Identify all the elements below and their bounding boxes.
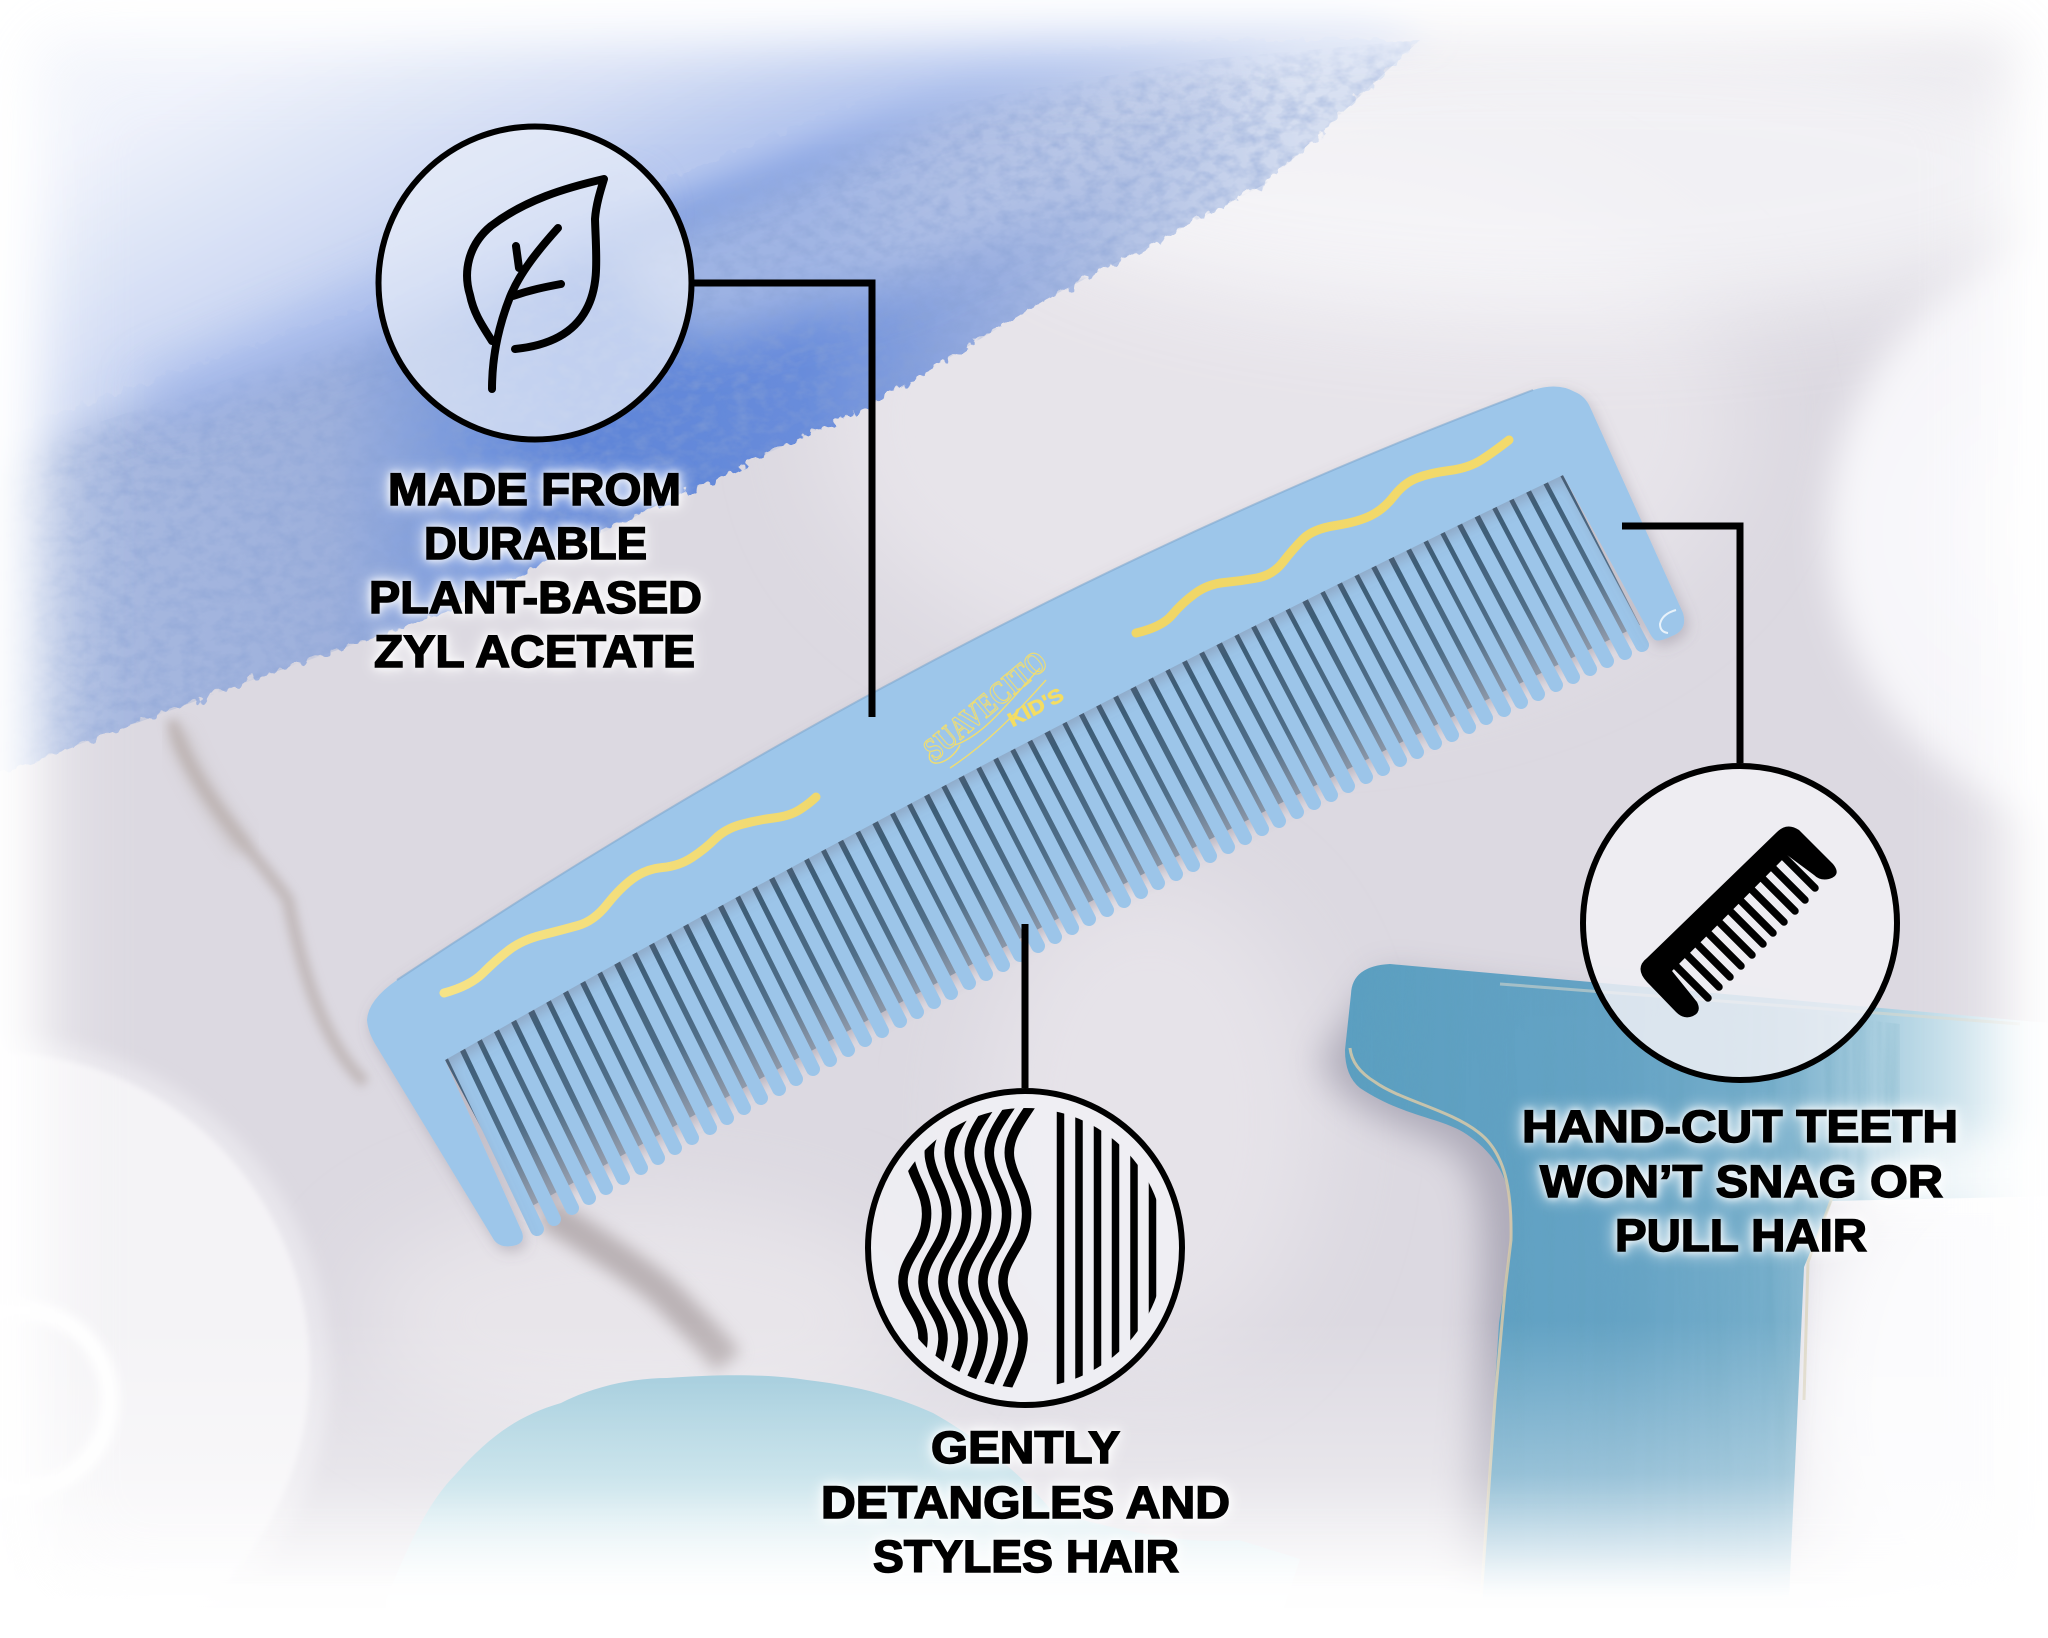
text: made from durable plant-based zyl acetate: DURABLE bbox=[424, 518, 647, 569]
background photo: white jar right bbox=[1828, 230, 2048, 830]
gold wave right bbox=[1136, 440, 1509, 633]
wavy hair strands bbox=[903, 1098, 1036, 1395]
comb logo: SUAVECITO bbox=[916, 643, 1054, 767]
background photo: teal wooden letter bottom bbox=[386, 1375, 1300, 1620]
text: gently detangles and styles hair bbox=[821, 1422, 1230, 1582]
background photo: teal wooden letter T bbox=[1322, 960, 2048, 1606]
icon: wavy and straight hair in circle bbox=[868, 1091, 1182, 1405]
background photo: white jar left bbox=[0, 1038, 330, 1638]
connector line bbox=[1022, 924, 1028, 1088]
comb gap shadow bbox=[445, 475, 1640, 1210]
text: made from durable plant-based zyl acetate: PLANT-BASED bbox=[369, 572, 702, 623]
connector line bbox=[1622, 526, 1740, 763]
icon: leaf in circle bbox=[378, 126, 692, 440]
text: made from durable plant-based zyl acetate: ZYL ACETATE bbox=[374, 626, 695, 677]
blue comb bbox=[367, 386, 1684, 1246]
text: hand-cut teeth won't snag or pull hair: WON’T SNAG OR bbox=[1540, 1156, 1943, 1207]
background photo: blue towel bbox=[0, 0, 1430, 800]
comb spine edge bbox=[397, 390, 1533, 980]
callout: detangles bbox=[821, 924, 1230, 1582]
comb logo: KID'S bbox=[1004, 684, 1068, 732]
callout: plant-based material bbox=[369, 126, 872, 717]
icon: comb in circle bbox=[1583, 766, 1897, 1080]
connector line bbox=[694, 283, 872, 717]
callout: hand-cut teeth bbox=[1522, 526, 1958, 1261]
text: gently detangles and styles hair: STYLES HAIR bbox=[873, 1531, 1179, 1582]
text: made from durable plant-based zyl acetate bbox=[369, 464, 702, 677]
gold wave left bbox=[444, 797, 816, 993]
comb teeth bbox=[454, 479, 1642, 1229]
text: hand-cut teeth won't snag or pull hair: HAND-CUT TEETH bbox=[1522, 1101, 1958, 1152]
text: gently detangles and styles hair: GENTLY bbox=[931, 1422, 1120, 1473]
comb body bbox=[367, 386, 1684, 1246]
text: hand-cut teeth won't snag or pull hair: PULL HAIR bbox=[1615, 1210, 1867, 1261]
text: hand-cut teeth won't snag or pull hair bbox=[1522, 1101, 1958, 1261]
straight hair strands bbox=[1060, 1100, 1152, 1400]
text: gently detangles and styles hair: DETANGLES AND bbox=[821, 1477, 1230, 1528]
text: made from durable plant-based zyl acetate: MADE FROM bbox=[388, 464, 681, 515]
